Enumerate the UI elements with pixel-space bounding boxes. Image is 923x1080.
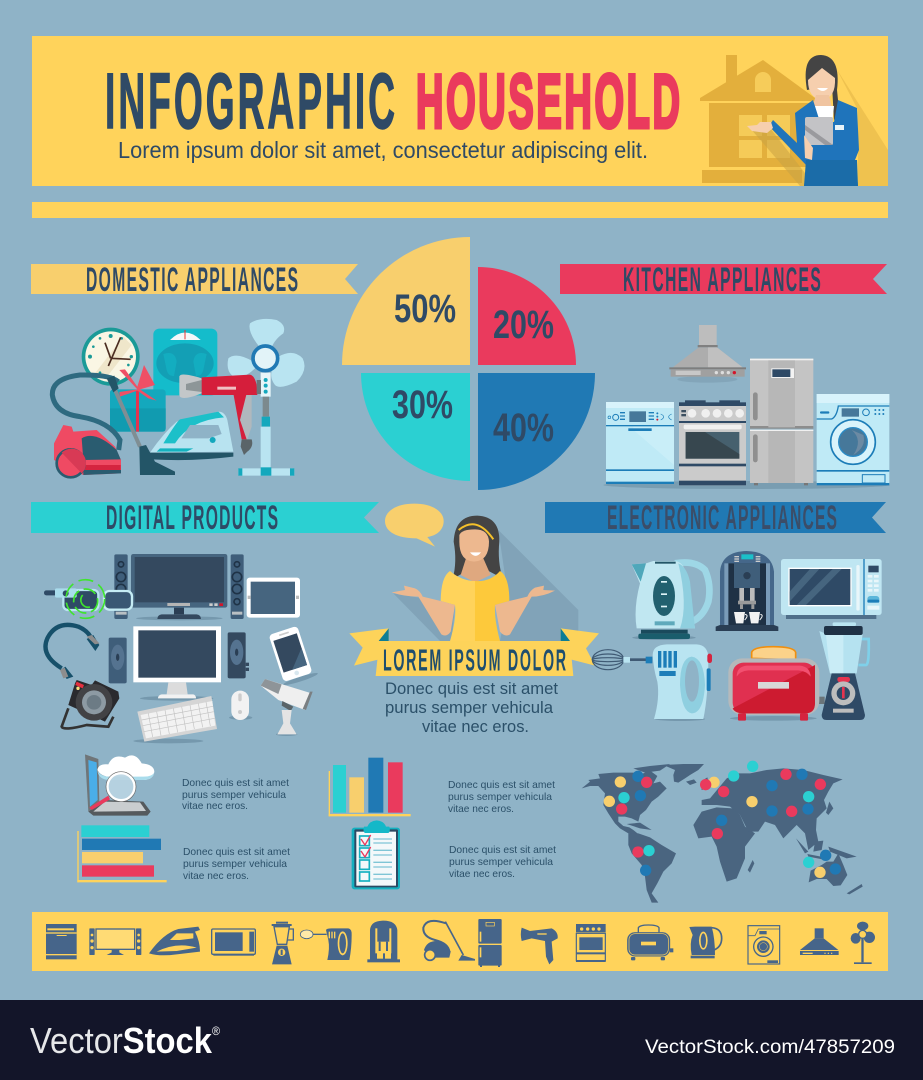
icon: fridge silhouette xyxy=(478,919,502,967)
caption: bottom right: vitae nec eros. xyxy=(449,868,515,880)
icon: laptop with cloud search xyxy=(85,754,154,816)
floor shadow xyxy=(603,481,890,489)
caption: top right: Donec quis est sit amet xyxy=(448,779,555,791)
center paragraph xyxy=(385,680,558,736)
bottom icon strip xyxy=(32,912,888,971)
image id link: VectorStock.com/47857209 xyxy=(645,1036,895,1058)
caption: top left: Donec quis est sit amet xyxy=(182,777,289,789)
yellow stripe xyxy=(32,202,888,218)
center paragraph: Donec quis est sit amet xyxy=(385,680,558,698)
icon: standing fan xyxy=(228,319,305,476)
icon: vacuum silhouette xyxy=(423,921,475,961)
caption: bottom left: vitae nec eros. xyxy=(183,870,249,882)
icon: desktop speakers xyxy=(109,632,249,683)
icon: bathroom scale xyxy=(153,329,217,395)
caption: top left: purus semper vehicula xyxy=(182,789,286,801)
icon: keyboard xyxy=(133,696,217,743)
icon: microwave silhouette xyxy=(212,929,255,956)
icon: stove silhouette xyxy=(576,924,606,962)
kitchen appliance illustrations xyxy=(603,325,890,489)
icon: wall clock xyxy=(82,328,140,386)
label 20%: 20% xyxy=(493,303,554,347)
long shadow xyxy=(393,530,578,641)
icon: washing machine xyxy=(817,394,889,485)
ribbon: kitchen appliances xyxy=(560,260,887,299)
icon: hand mixer silhouette xyxy=(300,928,352,960)
icon: hand mixer xyxy=(592,644,712,721)
caption: top right xyxy=(448,779,555,815)
icon: horizontal bar chart xyxy=(77,825,167,882)
title: HOUSEHOLD xyxy=(416,59,680,144)
label 30%: 30% xyxy=(392,383,453,427)
caption: bottom right: purus semper vehicula xyxy=(449,856,553,868)
icon: TV silhouette xyxy=(89,928,141,955)
center paragraph: purus semper vehicula xyxy=(385,699,554,717)
center section xyxy=(349,504,599,676)
domestic appliance illustrations xyxy=(52,319,305,477)
icon: clipboard checklist xyxy=(352,820,400,889)
ribbon: digital products xyxy=(31,498,379,537)
icon: headphones xyxy=(45,625,99,679)
banner ribbon xyxy=(349,628,599,676)
icon: microwave xyxy=(781,559,882,619)
woman figure xyxy=(392,516,555,641)
icon: hair dryer silhouette xyxy=(521,928,558,964)
label 40%: 40% xyxy=(493,406,554,450)
world map xyxy=(582,761,863,903)
electronic appliance illustrations xyxy=(592,551,882,721)
icon: coffee machine xyxy=(716,551,778,631)
icon: electric kettle xyxy=(632,561,709,640)
caption: bottom left: Donec quis est sit amet xyxy=(183,846,290,858)
logo VectorStock: VectorStock xyxy=(30,1020,221,1061)
icon: vacuum cleaner xyxy=(52,375,175,477)
icon: smartphone xyxy=(267,624,319,687)
icon: clothes iron xyxy=(149,412,233,460)
caption: top right: vitae nec eros. xyxy=(448,803,514,815)
speech bubble xyxy=(385,504,444,547)
icon: bar chart xyxy=(329,758,411,816)
title xyxy=(105,58,680,146)
icon: security camera xyxy=(261,679,313,736)
center paragraph: vitae nec eros. xyxy=(422,718,529,736)
ribbon: kitchen appliances: KITCHEN APPLIANCES xyxy=(623,260,821,299)
icon: VR glasses with signal xyxy=(44,580,132,618)
caption: bottom right xyxy=(449,844,556,880)
caption: bottom right: Donec quis est sit amet xyxy=(449,844,556,856)
icon: blender xyxy=(819,622,869,720)
digital product illustrations xyxy=(44,554,319,743)
icon: hood silhouette xyxy=(800,928,839,955)
icon: photo camera xyxy=(62,680,119,728)
icon: dishwasher xyxy=(606,402,674,484)
icon: iron silhouette xyxy=(149,927,200,955)
icon: toaster xyxy=(728,647,825,721)
caption: top left: vitae nec eros. xyxy=(182,800,248,812)
caption: bottom left xyxy=(183,846,290,882)
caption: top right: purus semper vehicula xyxy=(448,791,552,803)
icon: house xyxy=(700,55,815,183)
pie chart xyxy=(342,237,595,490)
icon: dishwasher silhouette xyxy=(46,924,77,959)
icon: tablet xyxy=(247,578,300,618)
icon: toaster silhouette xyxy=(627,925,673,960)
label 50%: 50% xyxy=(394,287,456,331)
icon: gift box xyxy=(110,365,166,432)
ribbon: electronic appliances xyxy=(545,498,886,537)
icon: desktop monitor xyxy=(133,626,221,701)
icon: kettle silhouette xyxy=(689,927,722,958)
continents xyxy=(582,764,863,903)
icon: home theatre TV with speakers xyxy=(114,554,244,620)
icon: washing machine silhouette xyxy=(748,926,780,964)
caption: top left xyxy=(182,777,289,812)
subtitle: Lorem ipsum dolor sit amet, consectetur adipiscing elit. xyxy=(118,137,648,163)
icon: blender silhouette xyxy=(272,922,293,964)
ribbon: domestic appliances: DOMESTIC APPLIANCES xyxy=(86,260,298,299)
ribbon: electronic appliances: ELECTRONIC APPLIANCES xyxy=(607,498,837,537)
location dots xyxy=(604,761,841,878)
icon: refrigerator xyxy=(750,359,813,485)
icon: computer mouse xyxy=(229,691,252,720)
logo VectorStock: ® xyxy=(212,1024,220,1038)
header banner xyxy=(32,36,888,186)
icon: cooker hood xyxy=(669,325,746,383)
small icons and text section xyxy=(77,754,411,889)
icon: gas stove oven xyxy=(679,400,746,485)
footer bar xyxy=(0,1000,923,1080)
ribbon: digital products: DIGITAL PRODUCTS xyxy=(106,498,278,537)
banner text: LOREM IPSUM DOLOR xyxy=(383,644,566,678)
icon: hair dryer xyxy=(179,375,261,455)
ribbon: domestic appliances xyxy=(31,260,358,299)
icon: fan silhouette xyxy=(851,922,875,964)
icon: coffee machine silhouette xyxy=(367,921,400,962)
woman presenter xyxy=(747,55,888,186)
title: INFOGRAPHIC xyxy=(105,58,395,146)
caption: bottom left: purus semper vehicula xyxy=(183,858,287,870)
